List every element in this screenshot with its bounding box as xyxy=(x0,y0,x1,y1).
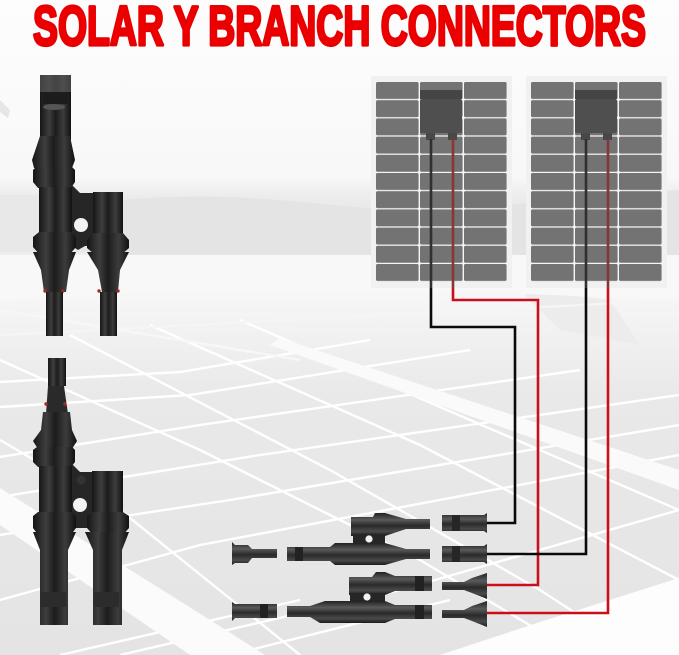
small connector ends right xyxy=(442,513,487,627)
solar panel 1 xyxy=(371,76,512,288)
wires on panels xyxy=(431,139,608,288)
small connector ends left xyxy=(232,542,277,621)
wire: panel 2 black xyxy=(487,288,586,554)
small Y connector lower xyxy=(287,572,432,623)
wire: panel 2 red xyxy=(487,288,608,613)
wire: panel 1 black xyxy=(431,288,515,523)
solar panel 2 xyxy=(526,76,667,288)
connector: top large Y branch xyxy=(32,75,129,336)
wire: panel 1 red xyxy=(453,288,538,585)
connector: bottom large Y branch xyxy=(33,358,129,625)
small Y connector upper xyxy=(287,513,430,565)
